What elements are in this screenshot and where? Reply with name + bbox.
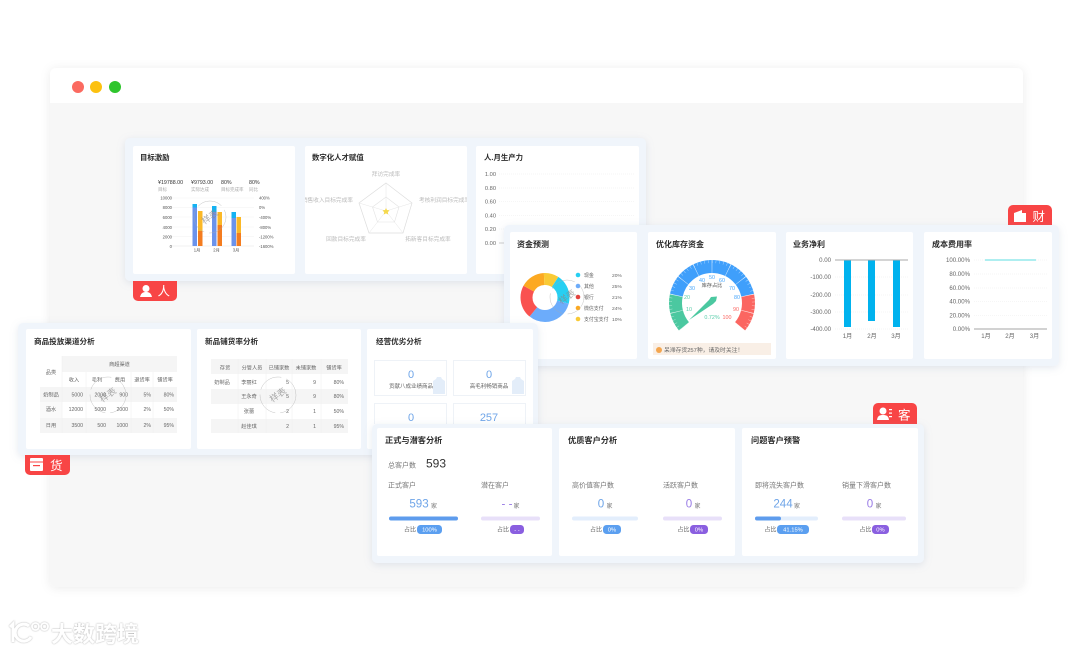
table: channels: 商超渠道 <box>109 360 130 368</box>
table: restock: 80% <box>334 380 344 386</box>
stamp <box>194 201 226 233</box>
legend: 其他 <box>584 283 594 290</box>
card: formal and potential: - - <box>514 528 520 534</box>
metric boxes: 贡献八成业绩商品 <box>389 382 433 390</box>
tag: goods: 货 <box>50 458 63 473</box>
card: quality customers: 0% <box>608 528 616 534</box>
table: channels <box>40 356 177 433</box>
metric boxes: 0 <box>408 369 414 381</box>
line chart: cost rate: 0.00% <box>953 326 971 333</box>
gauge: 10 <box>686 307 692 313</box>
legend: 现金 <box>584 272 594 279</box>
bar chart: target: 0 <box>170 244 173 249</box>
stamp <box>90 377 126 413</box>
card: formal and potential: 占比 <box>497 526 509 534</box>
table: channels: 3500 <box>71 423 83 429</box>
line chart: cost rate: 60.00% <box>949 285 971 292</box>
card: channel analysis: 商品投放渠道分析 <box>34 336 95 346</box>
gauge: 20 <box>684 295 690 301</box>
table: restock: 5 <box>286 380 289 386</box>
gauge: 库存占比 <box>702 281 722 289</box>
card: cost rate <box>924 232 1052 359</box>
card: formal and potential: 593 <box>426 456 446 470</box>
card: best and worst: 经营优劣分析 <box>376 336 422 346</box>
bar chart: net profit: -200.00 <box>810 292 832 299</box>
tag: customers <box>873 403 917 425</box>
card: quality customers: 家 <box>694 502 701 510</box>
line chart: cost rate: 2月 <box>1005 333 1015 340</box>
legend: 微信支付 <box>584 305 604 312</box>
bar chart: net profit: 3月 <box>891 333 901 340</box>
legend: 20% <box>612 273 622 279</box>
table: channels: 5000 <box>94 407 106 413</box>
line chart grid: 0.20 <box>485 227 496 233</box>
bar chart: net profit: -400.00 <box>810 326 832 333</box>
card: digital talent <box>302 146 470 274</box>
panel: people <box>125 138 646 301</box>
metric boxes: 257 <box>480 412 498 424</box>
card: problem customers: 占比 <box>859 526 872 534</box>
bar chart: target: 1月 <box>194 248 200 254</box>
table: restock: 2 <box>286 424 289 430</box>
bar chart: target: 2月 <box>213 248 220 254</box>
table: restock: 未铺家数 <box>296 364 317 372</box>
bar chart: target: 400% <box>259 196 270 200</box>
table: channels: 品类 <box>46 368 56 376</box>
panel: customers <box>372 403 924 563</box>
line chart: cost rate: 3月 <box>1030 333 1039 340</box>
table: channels: 费用 <box>115 376 125 384</box>
gauge: 70 <box>729 286 735 292</box>
table: restock: 王永奇 <box>241 392 257 400</box>
radar chart: 回款目标完成率 <box>326 235 366 243</box>
card: target incentive: 实际达成 <box>191 186 209 193</box>
card: problem customers: 问题客户预警 <box>751 435 800 445</box>
table: channels: 50% <box>164 407 174 413</box>
line chart: cost rate: 40.00% <box>949 298 971 306</box>
table: channels: 毛利 <box>92 376 102 384</box>
bar chart: target <box>160 196 274 254</box>
card: formal and potential: 占比 <box>404 526 416 534</box>
card: cash forecast <box>510 232 637 359</box>
card: target incentive: 同比 <box>249 186 258 193</box>
card: problem customers: 家 <box>876 502 882 510</box>
table: channels: 80% <box>164 393 174 399</box>
panel: finance <box>504 205 1059 366</box>
table: restock: 李丽红 <box>241 378 257 386</box>
card: target incentive: 目标 <box>158 186 167 193</box>
bar chart: net profit: -300.00 <box>810 309 832 316</box>
app window <box>50 68 1023 587</box>
watermark logo <box>10 622 139 647</box>
gauge: 0.72% <box>704 315 720 321</box>
line chart grid <box>485 172 634 247</box>
gauge: 90 <box>733 307 739 313</box>
table: restock: 5 <box>286 394 289 400</box>
card: monthly productivity: 人.月生产力 <box>484 153 523 162</box>
gauge: 100 <box>722 315 732 321</box>
bar chart: target: 4000 <box>163 225 173 230</box>
card: formal and potential: 100% <box>422 528 437 534</box>
bar chart: target: -400% <box>259 215 271 220</box>
bar chart: net profit <box>810 257 908 340</box>
card: target incentive: ¥9793.00 <box>191 180 213 186</box>
metric boxes: 0 <box>486 369 492 381</box>
card: net profit <box>786 232 913 359</box>
card: quality customers <box>559 428 735 556</box>
legend: 支付宝支付 <box>584 316 609 323</box>
line chart grid: 0.40 <box>485 214 496 220</box>
card: problem customers: 41.15% <box>783 528 803 534</box>
stamp: 样表 <box>556 287 577 306</box>
table: restock: 张蕾 <box>244 407 254 415</box>
legend: 25% <box>612 284 622 290</box>
metric boxes: 高毛利畅销商品 <box>470 382 509 390</box>
gauge: 40 <box>699 278 705 284</box>
card: formal and potential <box>377 428 552 556</box>
tag: finance: 财 <box>1032 210 1045 224</box>
bar chart: target: 8000 <box>163 205 173 210</box>
table: channels: 900 <box>119 393 128 399</box>
table: channels: 2% <box>144 423 151 429</box>
table: restock: 1 <box>313 409 316 415</box>
card: target incentive: 目标完成率 <box>221 186 244 193</box>
card: formal and potential: 总客户数 <box>388 460 416 470</box>
table: restock <box>211 359 348 433</box>
table: channels: 5% <box>144 393 151 399</box>
radar chart: 拜访完成率 <box>372 170 401 178</box>
bar chart: target: 2000 <box>163 234 173 240</box>
table: restock: 分管人员 <box>242 364 262 372</box>
line chart: cost rate: 100.00% <box>946 257 971 264</box>
table: restock: 95% <box>334 424 344 430</box>
card: quality customers: 活跃客户数 <box>663 480 698 490</box>
table: channels: 95% <box>164 423 174 429</box>
stamp: 样表 <box>199 207 220 226</box>
table: channels: 退货率 <box>134 376 150 384</box>
card: problem customers: 0 <box>867 498 873 510</box>
card: monthly productivity <box>476 146 639 274</box>
card: quality customers: 高价值客户数 <box>572 480 614 490</box>
card: quality customers: 0% <box>695 528 703 534</box>
gauge: 30 <box>689 286 695 292</box>
card: target incentive <box>133 146 295 274</box>
card: quality customers: 0 <box>686 498 692 510</box>
radar chart: 销售收入目标完成率 <box>302 196 353 204</box>
card: problem customers: 244 <box>773 498 793 510</box>
card: problem customers: 销量下滑客户数 <box>842 480 891 490</box>
card: best and worst <box>367 329 533 449</box>
stamp <box>260 377 296 413</box>
bar chart: net profit: 1月 <box>843 333 852 340</box>
card: channel analysis <box>26 329 191 449</box>
card: quality customers: 0 <box>598 498 604 510</box>
line chart grid: 0.80 <box>485 186 496 192</box>
gauge: 60 <box>719 278 725 284</box>
table: restock: 奶制品 <box>214 378 230 386</box>
stamp: 样表 <box>97 385 118 404</box>
card: cash forecast: 资金预测 <box>517 239 549 249</box>
line chart grid: 0.00 <box>485 241 496 247</box>
line chart: cost rate: 20.00% <box>949 312 971 320</box>
table: channels: 铺货率 <box>157 376 173 384</box>
card: inventory <box>648 232 776 361</box>
bar chart: net profit: 0.00 <box>819 257 832 264</box>
tag: people: 人 <box>158 284 170 298</box>
table: channels: 5000 <box>71 393 83 399</box>
gauge <box>654 245 770 361</box>
card: target incentive: 目标激励 <box>140 153 170 162</box>
bar chart: target: -800% <box>259 225 271 230</box>
tag: people <box>133 281 177 301</box>
bar chart: target: -1600% <box>259 244 274 249</box>
tag: customers: 客 <box>898 408 911 422</box>
card: quality customers: 占比 <box>677 526 690 534</box>
tag: finance <box>1008 205 1052 226</box>
table: restock: 80% <box>334 394 344 400</box>
bar chart: target: 10000 <box>160 196 173 200</box>
alert bar: 呆滞存货257种，请及时关注！ <box>664 346 743 354</box>
bar chart: net profit: 2月 <box>867 333 877 340</box>
table: channels: 奶制品 <box>43 391 59 399</box>
card: inventory: 优化库存资金 <box>656 239 704 249</box>
card: digital talent: 数字化人才赋值 <box>312 153 364 162</box>
bar chart: target: 6000 <box>163 215 173 220</box>
line chart: cost rate: 80.00% <box>949 271 971 278</box>
card: target incentive: ¥19788.00 <box>158 180 183 186</box>
table: restock: 9 <box>313 380 316 386</box>
table: restock: 赵佳琪 <box>241 422 257 430</box>
line chart grid: 1.00 <box>485 172 496 178</box>
bar chart: target: -1200% <box>259 234 274 240</box>
legend: 24% <box>612 306 622 312</box>
panel: goods <box>18 323 538 475</box>
line chart: cost rate: 1月 <box>981 333 991 340</box>
card: quality customers: 家 <box>606 502 613 510</box>
table: restock: 1 <box>313 424 316 430</box>
card: target incentive: 80% <box>249 180 260 186</box>
table: channels: 12000 <box>69 407 83 413</box>
gauge: 50 <box>709 275 715 281</box>
card: formal and potential: 593 <box>409 498 429 510</box>
table: restock: 已铺家数 <box>269 364 290 372</box>
card: formal and potential: 家 <box>514 502 520 510</box>
table: restock: 铺货率 <box>326 364 342 372</box>
bar chart: target: 0% <box>259 205 265 210</box>
metric boxes <box>374 360 526 424</box>
bar chart: target: 3月 <box>233 248 239 254</box>
line chart grid: 0.60 <box>485 200 496 206</box>
card: formal and potential: 正式与潜客分析 <box>385 435 442 445</box>
radar chart: 考核利润目标完成率 <box>419 196 470 204</box>
donut chart <box>526 279 564 316</box>
card: formal and potential: 正式客户 <box>388 480 416 490</box>
table: restock: 2 <box>286 409 289 415</box>
legend <box>576 272 622 323</box>
table: restock: 存货 <box>220 364 230 372</box>
legend: 10% <box>612 317 622 323</box>
icon: logo mark <box>10 623 48 642</box>
card: restock analysis <box>197 329 361 449</box>
card: restock analysis: 新品铺货率分析 <box>205 336 259 346</box>
card: quality customers: 占比 <box>590 526 602 534</box>
card: problem customers: 即将流失客户数 <box>755 480 804 490</box>
card: problem customers: 家 <box>794 502 800 510</box>
tag: goods <box>25 455 70 475</box>
table: channels: 500 <box>97 423 106 429</box>
card: cost rate: 成本费用率 <box>932 239 972 249</box>
card: formal and potential: 潜在客户 <box>481 480 509 490</box>
table: restock: 9 <box>313 394 316 400</box>
card: problem customers <box>742 428 918 556</box>
table: channels: 1000 <box>116 423 128 429</box>
radar chart: 拓新客目标完成率 <box>405 235 451 243</box>
card: problem customers: 占比 <box>764 526 776 534</box>
card: formal and potential: 家 <box>431 502 437 510</box>
card: net profit: 业务净利 <box>793 239 825 249</box>
table: channels: 2000 <box>116 407 128 413</box>
metric boxes: 0 <box>408 412 414 424</box>
radar chart <box>302 170 470 243</box>
table: channels: 2% <box>144 407 151 413</box>
legend: 21% <box>612 295 622 301</box>
table: channels: 收入 <box>69 376 79 384</box>
card: quality customers: 优质客户分析 <box>568 435 617 445</box>
stamp: 样表 <box>267 385 288 404</box>
table: channels: 2000 <box>94 393 106 399</box>
card: formal and potential: - - <box>502 498 513 510</box>
table: restock: 50% <box>334 409 344 415</box>
table: channels: 酒水 <box>46 405 57 413</box>
gauge: 80 <box>734 295 740 301</box>
bar chart: net profit: -100.00 <box>810 274 832 281</box>
line chart: cost rate <box>946 257 1047 340</box>
card: target incentive: 80% <box>221 180 232 186</box>
table: channels: 日用 <box>46 422 56 429</box>
legend: 银行 <box>584 294 594 301</box>
watermark logo: 大数跨境 <box>51 622 139 647</box>
card: problem customers: 0% <box>876 528 885 534</box>
